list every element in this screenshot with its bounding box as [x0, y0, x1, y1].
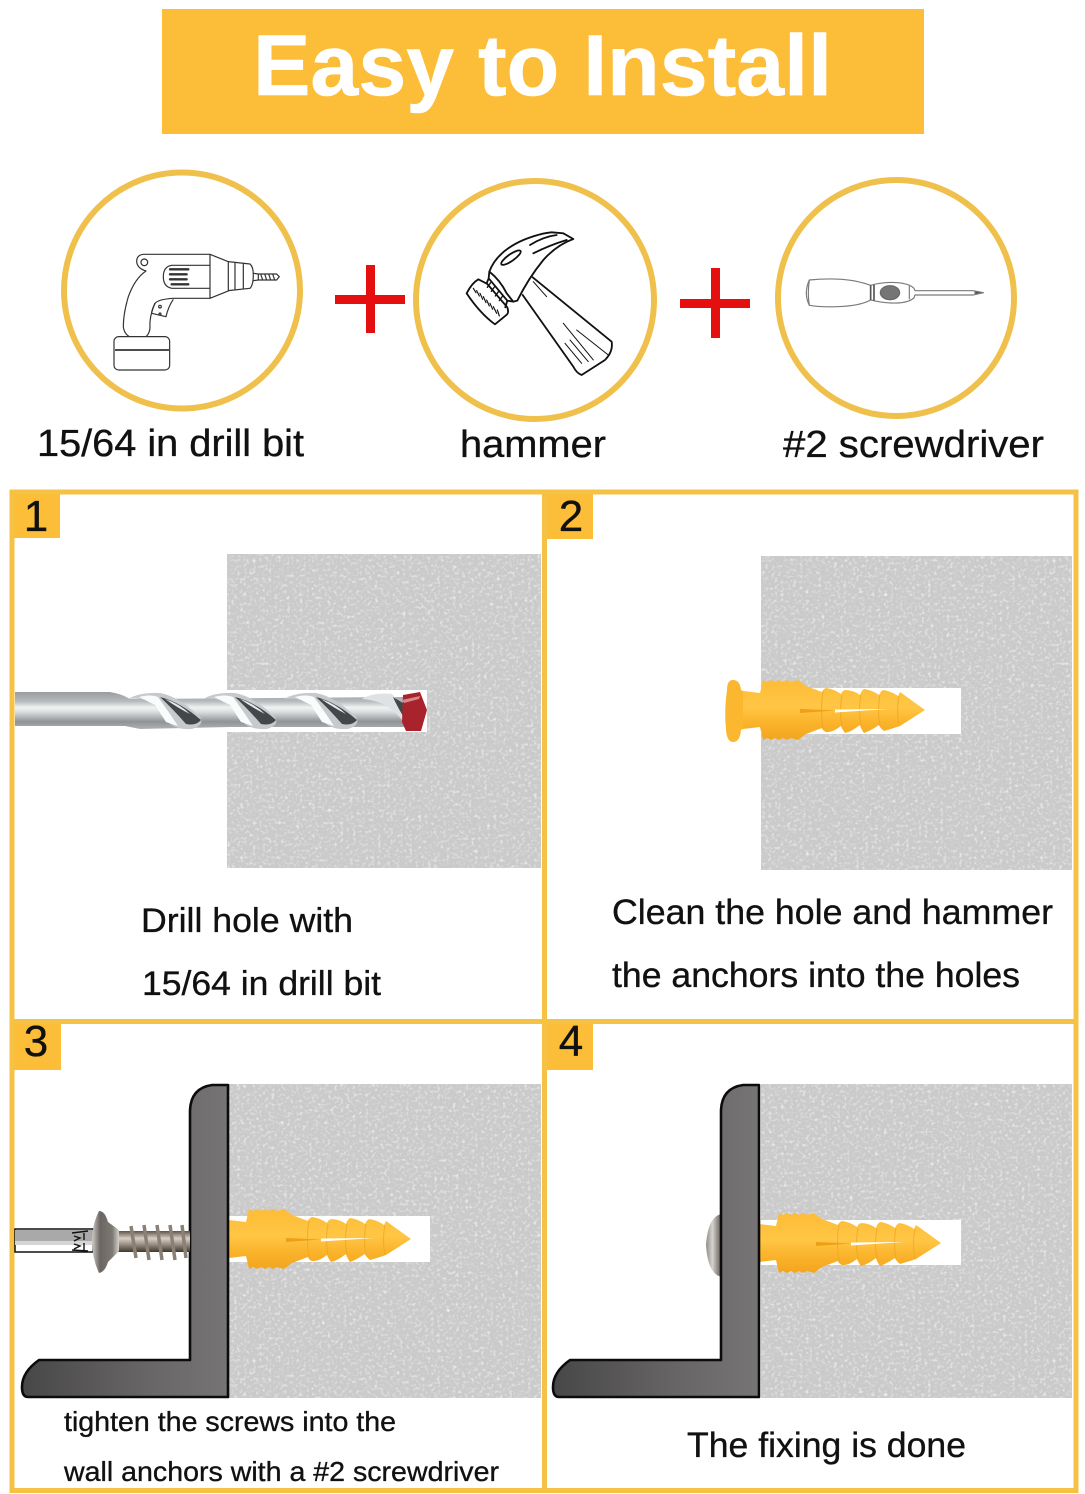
wall anchor with flange: [725, 680, 925, 742]
label: drill bit: 15/64 in drill bit: [37, 423, 304, 465]
concrete wall 1: [227, 554, 541, 868]
tool: hammer circle: [416, 181, 654, 419]
caption 3: wall anchors with a #2 screwdriver: [63, 1456, 499, 1487]
panel: step 4: [547, 1017, 1072, 1465]
panel: step 3: [14, 1017, 541, 1487]
number tab 1: [14, 492, 60, 541]
caption 3: [63, 1406, 499, 1487]
caption 4: The fixing is done: [687, 1426, 966, 1465]
screw: [92, 1211, 190, 1273]
panel: step 1: [14, 492, 541, 1003]
caption 1: 15/64 in drill bit: [142, 965, 382, 1003]
steps grid frame: [12, 492, 1076, 1490]
caption 2: [612, 893, 1053, 995]
caption 3: tighten the screws into the: [64, 1406, 396, 1437]
title banner: [162, 9, 924, 134]
tool: screwdriver circle: [778, 180, 1014, 416]
caption 2: the anchors into the holes: [612, 956, 1020, 995]
wall anchor 4: [759, 1213, 941, 1273]
number tab 2: 2: [559, 492, 583, 541]
plus sign 1: [335, 265, 405, 333]
drill bit: [15, 692, 427, 731]
number tab 4: 4: [559, 1017, 583, 1066]
icon: drill: [114, 254, 279, 370]
caption 2: Clean the hole and hammer: [612, 893, 1053, 932]
wall anchor 3: [229, 1209, 411, 1269]
icon: hammer: [467, 232, 612, 375]
title banner: Easy to Install: [253, 18, 832, 114]
caption 1: [141, 902, 382, 1003]
drilled hole 4: [761, 1220, 961, 1265]
number tab 3: 3: [24, 1017, 48, 1066]
number tab 3: [14, 1017, 61, 1070]
tool: drill circle: [64, 172, 300, 408]
icon: screwdriver: [806, 279, 983, 307]
label: screwdriver: #2 screwdriver: [783, 424, 1044, 466]
plus sign 2: [680, 268, 750, 338]
concrete wall 4: [761, 1084, 1072, 1398]
drilled hole 2: [761, 688, 961, 734]
angle bracket 4: [553, 1085, 759, 1397]
angle bracket 3: [22, 1085, 228, 1397]
drilled hole 1: [227, 690, 427, 732]
number tab 2: [547, 492, 593, 541]
concrete wall 3: [229, 1084, 541, 1398]
concrete wall 2: [761, 556, 1072, 870]
label: hammer: hammer: [460, 424, 606, 466]
caption 1: Drill hole with: [141, 902, 353, 940]
screw head: [706, 1214, 722, 1277]
drilled hole 3: [229, 1216, 430, 1262]
screwdriver shaft: [15, 1229, 93, 1252]
number tab 4: [547, 1017, 593, 1070]
number tab 1: 1: [24, 492, 48, 541]
panel: step 2: [547, 492, 1072, 995]
